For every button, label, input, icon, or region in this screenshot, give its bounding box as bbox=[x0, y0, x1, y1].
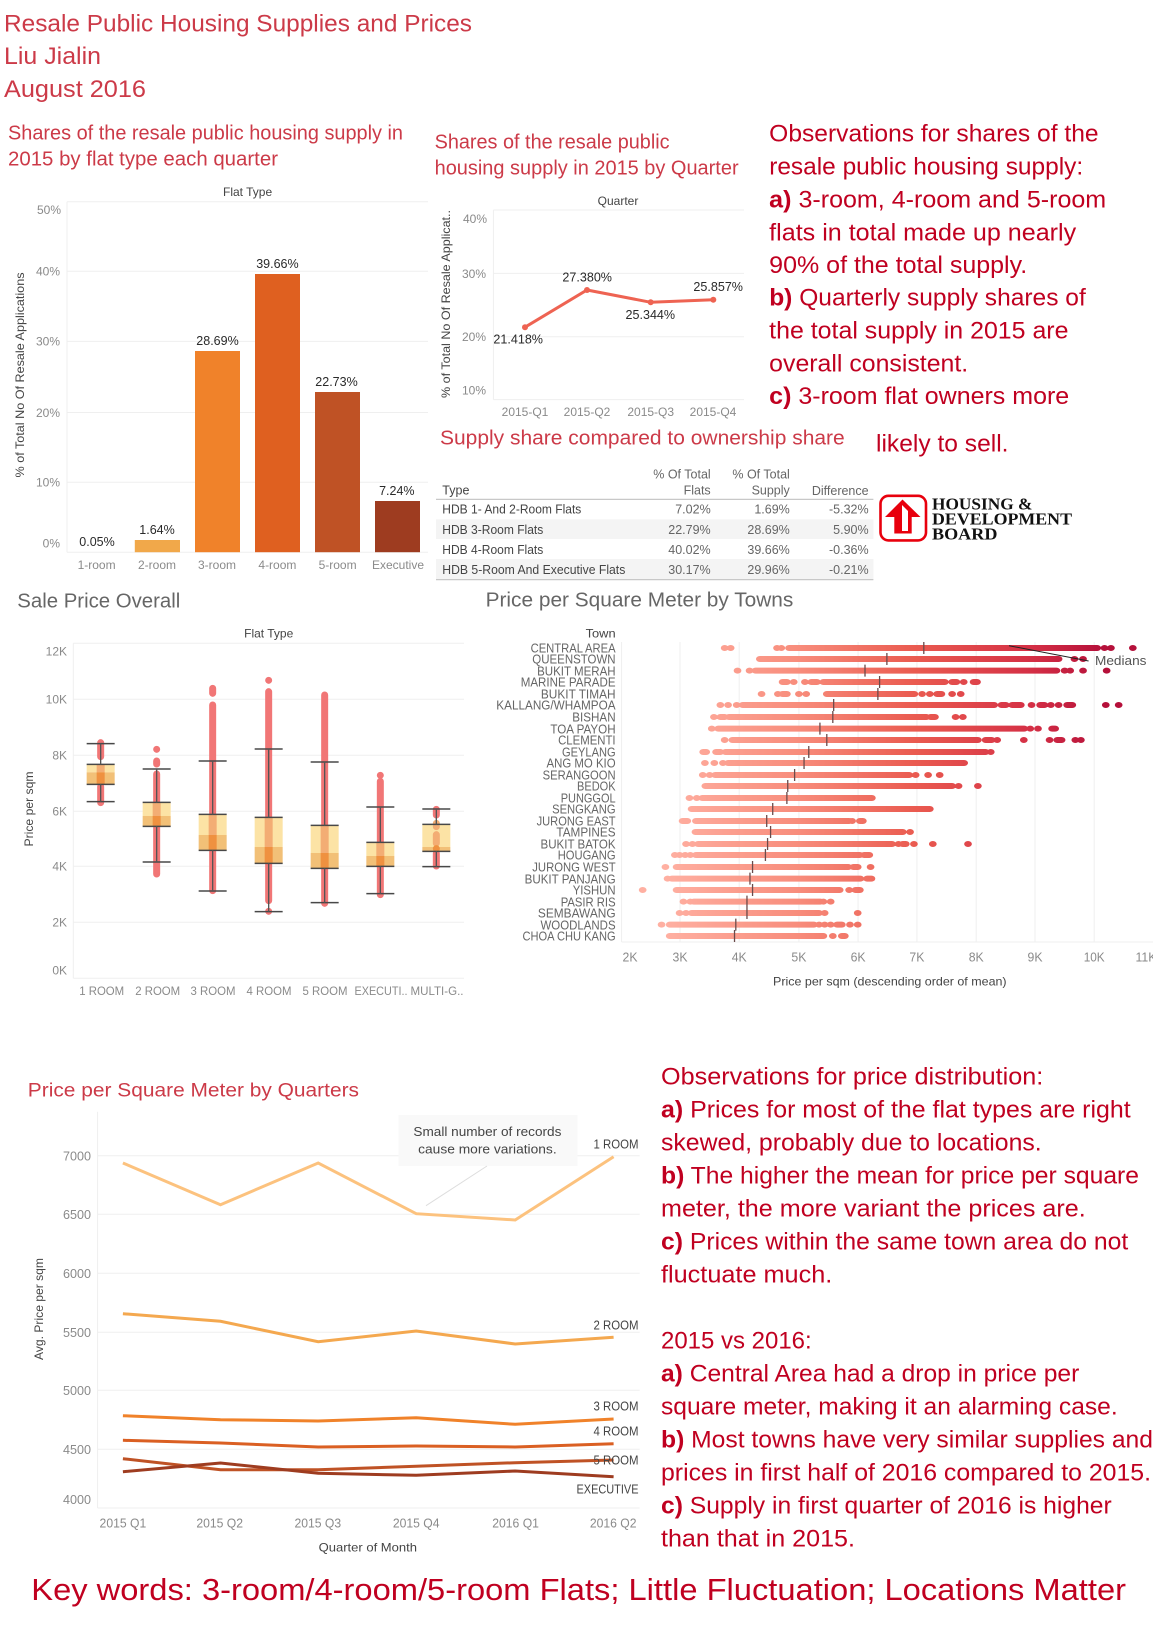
table row: 3 room bbox=[442, 523, 869, 537]
y axis labels: 0K bbox=[52, 963, 67, 977]
town labels: BUKIT MERAH bbox=[537, 664, 616, 678]
town labels: PUNGGOL bbox=[561, 792, 616, 806]
y axis labels bbox=[63, 1148, 91, 1507]
town labels: BUKIT TIMAH bbox=[541, 688, 616, 702]
table row: 4 room: -0.36% bbox=[829, 543, 869, 557]
y axis labels: 6000 bbox=[63, 1266, 91, 1281]
y axis labels bbox=[462, 212, 487, 397]
observations: supply: a) 3-room, 4-room and 5-room bbox=[769, 187, 1106, 214]
title: Liu Jialin bbox=[4, 43, 101, 70]
observations: price distribution: b) The higher the mean for price per square bbox=[661, 1162, 1139, 1190]
x axis labels: 2015 Q4 bbox=[393, 1516, 440, 1531]
observations: supply: b) Quarterly supply shares of bbox=[769, 284, 1086, 312]
town labels: HOUGANG bbox=[558, 849, 616, 863]
line end labels: 5 ROOM bbox=[594, 1452, 638, 1467]
x axis title: Quarter of Month bbox=[319, 1541, 417, 1555]
x axis labels bbox=[502, 405, 737, 419]
observations: 2015 vs 2016: c) Supply in first quarter of 2016 is higher bbox=[661, 1493, 1112, 1520]
observations: price distribution: skewed, probably due to locations. bbox=[661, 1129, 1042, 1156]
observations: price distribution: a) Prices for most of the flat types are right bbox=[661, 1096, 1131, 1124]
observations: 2015 vs 2016 bbox=[661, 1328, 1153, 1553]
y axis labels: 20% bbox=[462, 330, 486, 344]
town labels: CLEMENTI bbox=[558, 734, 616, 748]
x axis labels: 2016 Q1 bbox=[492, 1516, 539, 1531]
y axis labels: 20% bbox=[36, 406, 60, 420]
line end labels: 3 ROOM bbox=[594, 1398, 638, 1413]
dot strip chart: price per sqm by town bbox=[496, 626, 1153, 989]
x axis labels: 2015-Q3 bbox=[627, 405, 674, 419]
table row: 3 room: 5.90% bbox=[833, 523, 869, 537]
heading: supply vs ownership: Supply share compared to ownership share bbox=[440, 427, 845, 449]
x axis labels: 3-room bbox=[198, 558, 236, 572]
town labels: SEMBAWANG bbox=[538, 907, 616, 921]
table header: Supply bbox=[752, 483, 791, 497]
observations: 2015 vs 2016: square meter, making it an alarming case. bbox=[661, 1394, 1118, 1421]
x axis labels: 4K bbox=[732, 950, 747, 965]
boxes bbox=[87, 680, 450, 912]
table header: % Of Total bbox=[732, 467, 790, 481]
observations: 2015 vs 2016: b) Most towns have very similar supplies and bbox=[661, 1427, 1153, 1454]
table row: 1 and 2 room: -5.32% bbox=[829, 503, 869, 517]
observations: 2015 vs 2016: a) Central Area had a drop in price per bbox=[661, 1361, 1079, 1388]
town labels: WOODLANDS bbox=[540, 918, 616, 932]
x axis labels: Executive bbox=[372, 558, 424, 572]
table row: 4 room: HDB 4-Room Flats bbox=[442, 543, 543, 557]
median ticks bbox=[735, 642, 924, 942]
heading: supply by quarter: Shares of the resale public bbox=[435, 132, 670, 154]
medians annotation: Medians bbox=[1095, 653, 1147, 668]
observations: supply: overall consistent. bbox=[769, 350, 968, 377]
key words footer: Key words: 3-room/4-room/5-room Flats; Little Fluctuation; Locations Matter bbox=[31, 1573, 1126, 1607]
x axis labels: 5-room bbox=[319, 558, 357, 572]
table row: 5 room and executive: HDB 5-Room And Executive Flats bbox=[442, 563, 625, 577]
bars bbox=[135, 274, 420, 552]
observations: supply: flats in total made up nearly bbox=[769, 220, 1077, 246]
y axis labels: 5500 bbox=[63, 1325, 91, 1340]
observations: 2015 vs 2016: 2015 vs 2016: bbox=[661, 1328, 812, 1355]
x axis labels: 6K bbox=[851, 950, 866, 965]
callout: small number of records: Small number of records bbox=[413, 1124, 562, 1139]
y axis title: % of Total No Of Resale Applications bbox=[13, 272, 27, 478]
point value labels bbox=[493, 271, 743, 347]
y axis labels: 10K bbox=[46, 693, 67, 707]
town labels: BEDOK bbox=[577, 780, 616, 794]
town labels: ANG MO KIO bbox=[546, 757, 616, 771]
observations: supply bbox=[769, 120, 1106, 457]
y axis labels: 5000 bbox=[63, 1383, 91, 1398]
table header: Difference bbox=[812, 484, 869, 498]
x axis labels bbox=[79, 984, 463, 998]
bar chart: supply share by flat type: Flat Type bbox=[223, 185, 272, 199]
line end labels: 4 ROOM bbox=[594, 1423, 638, 1438]
town labels: QUEENSTOWN bbox=[532, 653, 616, 667]
town labels: MARINE PARADE bbox=[521, 676, 616, 690]
logo: housing and development board: HOUSING & bbox=[932, 494, 1032, 513]
title: Resale Public Housing Supplies and Prices bbox=[4, 10, 472, 37]
x axis labels: 2015 Q1 bbox=[100, 1516, 146, 1531]
line end labels bbox=[576, 1136, 639, 1496]
y axis labels bbox=[36, 203, 61, 551]
point value labels: 27.380% bbox=[562, 271, 612, 285]
x axis title: Price per sqm (descending order of mean) bbox=[773, 975, 1007, 989]
x axis labels: 4-room bbox=[258, 558, 296, 572]
town labels: CENTRAL AREA bbox=[531, 642, 616, 656]
x axis labels: 5K bbox=[791, 950, 807, 965]
town labels: TAMPINES bbox=[556, 826, 616, 840]
heading: price by towns: Price per Square Meter by Towns bbox=[486, 590, 793, 612]
line: 1 room bbox=[123, 1157, 614, 1220]
box plot: sale price by flat type bbox=[22, 627, 464, 998]
x axis labels bbox=[622, 950, 1153, 965]
x axis labels: 2015-Q2 bbox=[564, 405, 611, 419]
x axis labels: 1 ROOM bbox=[79, 984, 124, 998]
observations: price distribution bbox=[661, 1063, 1139, 1288]
y axis labels: 40% bbox=[463, 212, 487, 226]
x axis labels: 2 ROOM bbox=[135, 984, 180, 998]
table row: 5 room and executive: 30.17% bbox=[668, 563, 711, 577]
observations: supply: the total supply in 2015 are bbox=[769, 317, 1068, 344]
table row: 3 room: 22.79% bbox=[668, 523, 711, 537]
box: 3 room bbox=[199, 688, 227, 891]
line chart: price per sqm by quarter bbox=[32, 1112, 640, 1555]
y axis labels: 4000 bbox=[63, 1492, 91, 1507]
table row: 1 and 2 room: 1.69% bbox=[754, 503, 790, 517]
x axis labels: 2K bbox=[622, 950, 638, 965]
y axis title: Avg. Price per sqm bbox=[32, 1258, 46, 1360]
table row: 4 room: 39.66% bbox=[747, 543, 790, 557]
town labels bbox=[496, 642, 616, 944]
table row: 3 room: HDB 3-Room Flats bbox=[442, 523, 543, 537]
x axis labels: 2015 Q2 bbox=[196, 1516, 243, 1531]
bar value labels bbox=[79, 257, 415, 549]
x axis labels: 5 ROOM bbox=[302, 984, 348, 998]
line chart: supply share by quarter: Quarter bbox=[598, 194, 638, 208]
x axis labels: 9K bbox=[1028, 950, 1043, 965]
logo: housing and development board bbox=[880, 494, 1072, 543]
y axis labels: 30% bbox=[462, 267, 486, 281]
y axis labels: 40% bbox=[36, 265, 60, 279]
observations: 2015 vs 2016: prices in first half of 2016 compared to 2015. bbox=[661, 1460, 1151, 1487]
table row: 1 and 2 room: 7.02% bbox=[675, 503, 711, 517]
x axis labels: 8K bbox=[969, 950, 984, 965]
logo: housing and development board: BOARD bbox=[932, 524, 997, 543]
y axis labels: 8K bbox=[52, 749, 67, 763]
y axis labels: 12K bbox=[46, 644, 67, 658]
y axis title: % of Total No Of Resale Applicat.. bbox=[439, 210, 453, 398]
y axis labels: 6500 bbox=[63, 1207, 91, 1222]
heading: supply by flat type: Shares of the resale public housing supply in bbox=[8, 123, 403, 145]
town labels: JURONG EAST bbox=[537, 815, 616, 829]
x axis labels: 2015-Q4 bbox=[690, 405, 737, 419]
x axis labels: 1-room bbox=[78, 558, 116, 572]
x axis labels: 2015 Q3 bbox=[294, 1516, 341, 1531]
line end labels: 1 ROOM bbox=[594, 1136, 638, 1151]
x axis labels: MULTI-G.. bbox=[410, 984, 464, 998]
y axis labels: 10% bbox=[462, 383, 486, 397]
point value labels: 21.418% bbox=[493, 333, 543, 347]
observations: price distribution: fluctuate much. bbox=[661, 1262, 832, 1288]
bar value labels: 22.73% bbox=[315, 375, 358, 389]
observations: price distribution: c) Prices within the same town area do not bbox=[661, 1228, 1128, 1256]
medians annotation bbox=[1009, 646, 1147, 668]
town labels: TOA PAYOH bbox=[550, 722, 616, 736]
y axis labels bbox=[46, 644, 67, 977]
y axis labels: 0% bbox=[43, 537, 60, 551]
box: multi-generation bbox=[422, 809, 450, 867]
table row: 1 and 2 room bbox=[442, 503, 869, 517]
line: 4 room bbox=[123, 1440, 614, 1447]
bar value labels: 1.64% bbox=[139, 523, 175, 537]
x axis labels: 2016 Q2 bbox=[590, 1516, 637, 1531]
y axis labels: 7000 bbox=[63, 1148, 91, 1163]
town labels: YISHUN bbox=[573, 884, 616, 898]
town labels: GEYLANG bbox=[562, 746, 616, 760]
town labels: CHOA CHU KANG bbox=[522, 930, 616, 944]
callout: small number of records bbox=[399, 1115, 577, 1206]
x axis labels: 3K bbox=[672, 950, 688, 965]
x axis labels: 10K bbox=[1084, 950, 1105, 965]
table row: 5 room and executive: 29.96% bbox=[747, 563, 790, 577]
icon: red house arrow bbox=[880, 496, 926, 540]
town labels: BUKIT BATOK bbox=[540, 838, 616, 852]
observations: supply: resale public housing supply: bbox=[769, 154, 1083, 181]
town labels: SERANGOON bbox=[543, 769, 616, 783]
box: 2 room bbox=[143, 749, 171, 874]
y axis labels: 50% bbox=[37, 203, 61, 217]
title bbox=[4, 10, 472, 103]
heading: supply by quarter: housing supply in 2015 by Quarter bbox=[435, 158, 739, 180]
bar value labels: 0.05% bbox=[79, 535, 115, 549]
town labels: BISHAN bbox=[572, 711, 616, 725]
bar value labels: 28.69% bbox=[196, 334, 239, 348]
table: supply share vs ownership share bbox=[436, 467, 873, 580]
observations: supply: c) 3-room flat owners more bbox=[769, 383, 1069, 410]
point value labels: 25.344% bbox=[626, 308, 675, 322]
y axis labels: 4K bbox=[52, 860, 67, 874]
x axis labels bbox=[100, 1516, 637, 1531]
line: executive bbox=[123, 1463, 614, 1477]
table row: 3 room: 28.69% bbox=[747, 523, 790, 537]
logo: housing and development board: DEVELOPMENT bbox=[932, 509, 1072, 528]
bar value labels: 39.66% bbox=[256, 257, 299, 271]
point value labels: 25.857% bbox=[693, 280, 743, 294]
bar chart: supply share by flat type bbox=[13, 185, 428, 572]
observations: supply: likely to sell. bbox=[876, 430, 1008, 457]
trend line bbox=[522, 287, 716, 330]
town price strips bbox=[643, 648, 1133, 936]
heading: supply by quarter bbox=[435, 132, 739, 180]
line: 2 room bbox=[123, 1314, 614, 1344]
bar value labels: 7.24% bbox=[379, 484, 415, 498]
y axis labels: 6K bbox=[52, 805, 67, 819]
box plot: sale price by flat type: Flat Type bbox=[244, 627, 294, 641]
table header bbox=[442, 467, 869, 498]
heading: price by quarters: Price per Square Meter by Quarters bbox=[28, 1081, 359, 1102]
x axis labels: 3 ROOM bbox=[190, 984, 236, 998]
box: executive bbox=[366, 775, 394, 895]
table row: 4 room bbox=[442, 543, 869, 557]
town labels: KALLANG/WHAMPOA bbox=[496, 699, 616, 713]
town labels: SENGKANG bbox=[552, 803, 616, 817]
y axis labels: 4500 bbox=[63, 1442, 91, 1457]
dot strip chart: price per sqm by town: Town bbox=[586, 626, 616, 640]
heading: supply by flat type bbox=[8, 123, 403, 171]
y axis title: Price per sqm bbox=[22, 772, 36, 846]
x axis labels: 2-room bbox=[138, 558, 176, 572]
line: 5 room bbox=[123, 1459, 614, 1470]
x axis labels bbox=[78, 558, 424, 572]
line: 3 room bbox=[123, 1416, 614, 1424]
title: August 2016 bbox=[4, 76, 146, 103]
line end labels: 2 ROOM bbox=[594, 1317, 638, 1332]
box: 4 room bbox=[255, 680, 283, 912]
table header: Type bbox=[442, 483, 469, 497]
callout: small number of records: cause more variations. bbox=[418, 1141, 557, 1156]
town labels: PASIR RIS bbox=[561, 895, 616, 909]
x axis labels: 2015-Q1 bbox=[502, 405, 549, 419]
table row: 5 room and executive: -0.21% bbox=[829, 563, 869, 577]
x axis labels: 4 ROOM bbox=[246, 984, 292, 998]
observations: supply: Observations for shares of the bbox=[769, 120, 1099, 148]
town labels: JURONG WEST bbox=[532, 861, 616, 875]
observations: 2015 vs 2016: than that in 2015. bbox=[661, 1526, 855, 1553]
observations: price distribution: meter, the more variant the prices are. bbox=[661, 1196, 1086, 1222]
y axis labels: 2K bbox=[52, 916, 67, 930]
table row: 5 room and executive bbox=[442, 563, 869, 577]
table row: 1 and 2 room: HDB 1- And 2-Room Flats bbox=[442, 503, 581, 517]
y axis labels: 30% bbox=[36, 335, 60, 349]
observations: price distribution: Observations for price distribution: bbox=[661, 1063, 1043, 1090]
table row: 4 room: 40.02% bbox=[668, 543, 711, 557]
line chart: supply share by quarter bbox=[439, 194, 744, 419]
x axis labels: 7K bbox=[909, 950, 925, 965]
box: 5 room bbox=[311, 695, 339, 903]
x axis labels: EXECUTI.. bbox=[354, 984, 408, 998]
observations: supply: 90% of the total supply. bbox=[769, 252, 1027, 279]
box: 1 room bbox=[87, 743, 115, 803]
heading: supply by flat type: 2015 by flat type each quarter bbox=[8, 149, 278, 171]
line end labels: EXECUTIVE bbox=[576, 1481, 639, 1496]
table header: % Of Total bbox=[653, 467, 711, 481]
y axis labels: 10% bbox=[36, 476, 60, 490]
town labels: BUKIT PANJANG bbox=[525, 872, 616, 886]
table header: Flats bbox=[684, 483, 711, 497]
heading: sale price overall: Sale Price Overall bbox=[17, 591, 180, 613]
